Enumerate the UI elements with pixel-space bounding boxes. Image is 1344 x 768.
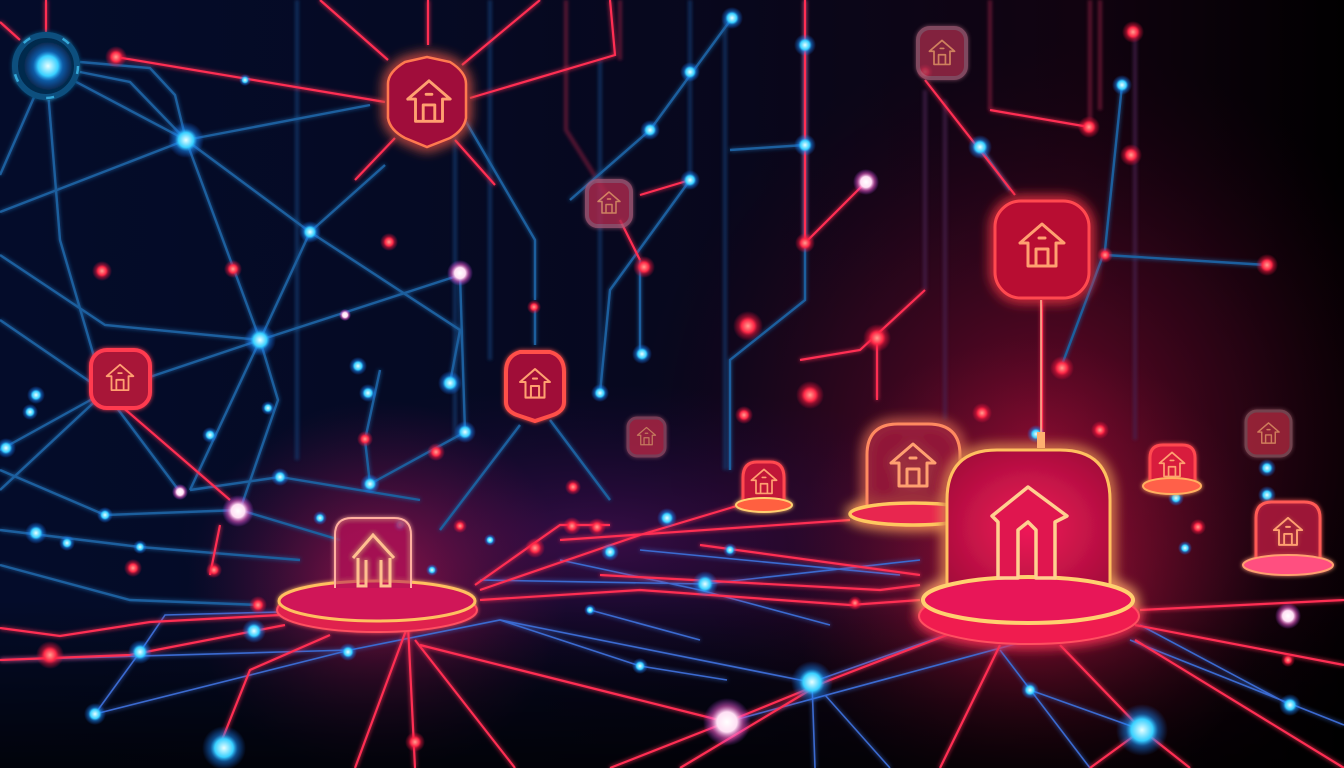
- icon: house left: [91, 350, 150, 408]
- icon: house centre: [506, 352, 564, 421]
- icon: large house tag on the right: [995, 201, 1089, 298]
- icon: medium domed house on platform: [850, 424, 976, 525]
- icon: dim small house: [628, 418, 665, 456]
- icon: small domed house on platform: [736, 462, 792, 512]
- platform: large domed house right: [919, 450, 1139, 644]
- icon: domed house lower right: [1243, 502, 1333, 575]
- blue floor lines: [0, 550, 1344, 768]
- platform: domed house left: [277, 518, 477, 632]
- icon: dim house upper middle: [587, 181, 631, 226]
- white-pink nodes: [95, 169, 1301, 746]
- connector: tag to dome: [1037, 300, 1045, 448]
- blue network lines: [0, 18, 1267, 605]
- icon: top house octagon: [388, 57, 466, 147]
- icon: dim house far right: [1246, 411, 1291, 456]
- icon: dim house top right: [918, 28, 966, 78]
- distant vertical lines: [297, 0, 1135, 470]
- icon: main blue hub: [14, 34, 78, 98]
- icon: small domed house right: [1143, 445, 1201, 494]
